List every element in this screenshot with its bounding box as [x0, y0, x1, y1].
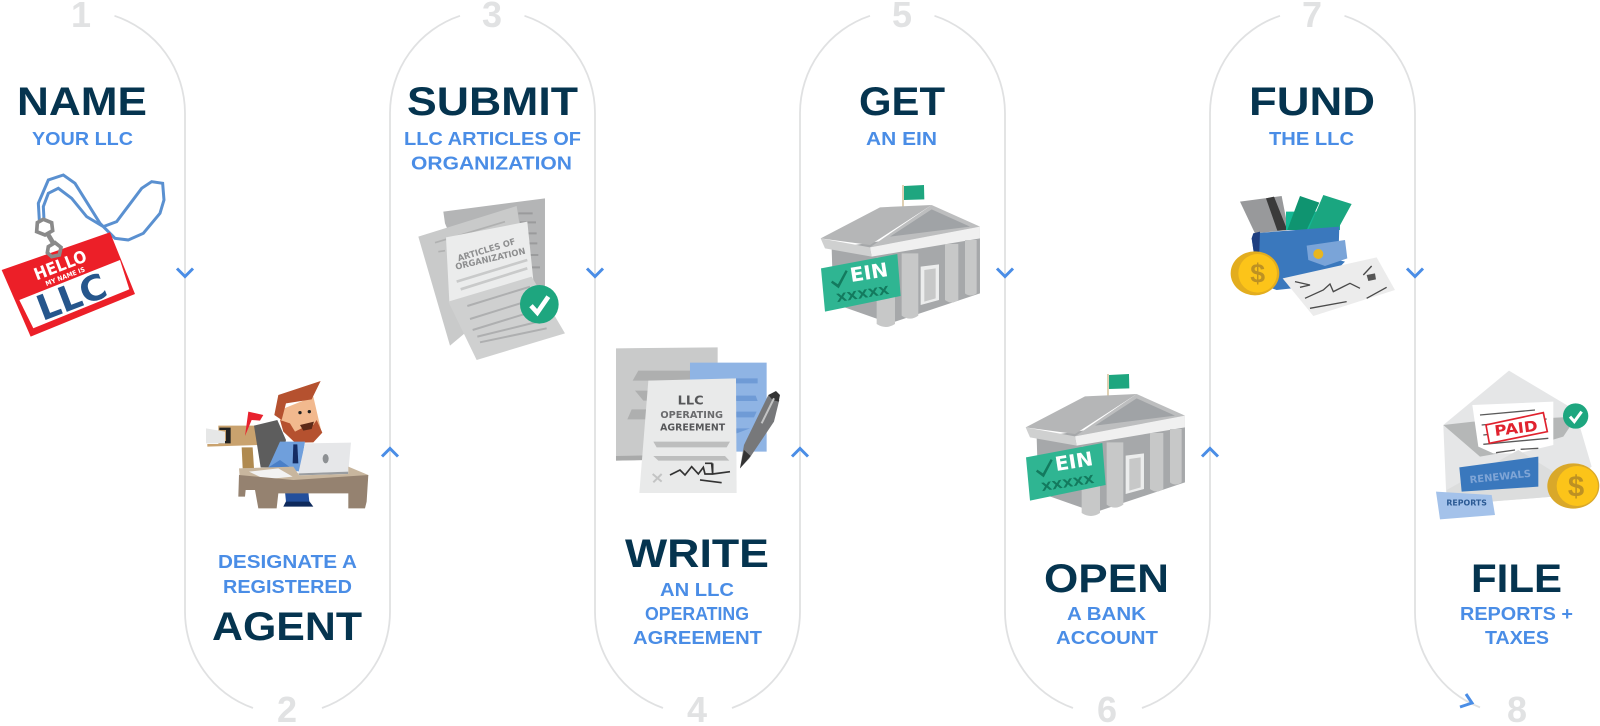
- subtitle: AN LLC: [660, 579, 734, 600]
- subtitle: [404, 128, 581, 174]
- subtitle: [1056, 603, 1159, 648]
- icon: wallet, coin and cheque: $: [1250, 259, 1265, 289]
- subtitle: AN EIN: [866, 128, 937, 149]
- heading FUND: FUND: [1249, 80, 1375, 124]
- icon: envelope with paid bill, reports and coin: RENEWALS: [1469, 469, 1532, 486]
- subtitle: ORGANIZATION: [411, 152, 572, 174]
- icon: envelope with paid bill, reports and coin: [1436, 371, 1599, 519]
- icon: envelope with paid bill, reports and coin: $: [1568, 471, 1584, 504]
- step 7: fund the LLC: [1231, 0, 1395, 316]
- step 6: open a bank account: [1026, 374, 1185, 726]
- icon: envelope with paid bill, reports and coin: PAID: [1494, 418, 1539, 440]
- subtitle: LLC ARTICLES OF: [404, 128, 581, 149]
- step 5: get an EIN: [821, 0, 980, 327]
- icon: operating agreement and pen: AGREEMENT: [660, 423, 725, 434]
- heading FILE: FILE: [1471, 557, 1562, 601]
- step 8: file reports and taxes: [1436, 371, 1599, 726]
- heading OPEN: OPEN: [1044, 557, 1169, 601]
- subtitle: YOUR LLC: [32, 128, 133, 149]
- icon: agent at desk with mailbox: [206, 381, 368, 508]
- subtitle: [1460, 603, 1573, 648]
- step 3: submit articles of organization: [404, 0, 581, 360]
- subtitle: TAXES: [1485, 627, 1549, 648]
- step 1: name your LLC: [2, 0, 164, 337]
- subtitle: [218, 551, 357, 597]
- arrows on connector: [177, 268, 1472, 707]
- icon: bank with EIN sign: EIN: [1053, 447, 1095, 476]
- icon: name badge on lanyard: MY NAME IS: [44, 266, 86, 288]
- heading GET: GET: [859, 80, 945, 124]
- icon: envelope with paid bill, reports and coin: REPORTS: [1446, 498, 1487, 507]
- subtitle: REPORTS +: [1460, 603, 1573, 624]
- icon: bank with EIN sign: XXXXX: [1040, 472, 1095, 494]
- heading WRITE: WRITE: [625, 532, 769, 576]
- icon: bank with EIN sign: [1026, 374, 1185, 516]
- icon: operating agreement and pen: [616, 347, 780, 493]
- step 2: designate a registered agent: [206, 381, 368, 726]
- icon: name badge on lanyard: [2, 175, 164, 337]
- icon: bank with EIN sign: EIN: [848, 258, 890, 287]
- icon: operating agreement and pen: OPERATING: [660, 410, 723, 421]
- icon: wallet, coin and cheque: [1231, 195, 1395, 316]
- subtitle: ACCOUNT: [1056, 627, 1159, 648]
- icon: bank with EIN sign: XXXXX: [835, 283, 890, 305]
- subtitle: [633, 579, 763, 648]
- heading NAME: NAME: [17, 80, 147, 124]
- subtitle: THE LLC: [1269, 128, 1354, 149]
- icon: articles document with check: ORGANIZATION: [455, 247, 527, 273]
- heading SUBMIT: SUBMIT: [407, 80, 578, 124]
- heading AGENT: AGENT: [212, 605, 362, 649]
- icon: operating agreement and pen: LLC: [678, 393, 704, 408]
- step 4: write operating agreement: [616, 347, 780, 726]
- subtitle: AGREEMENT: [633, 627, 763, 648]
- subtitle: REGISTERED: [223, 576, 352, 597]
- subtitle: DESIGNATE A: [218, 551, 357, 572]
- subtitle: OPERATING: [645, 603, 749, 624]
- icon: name badge on lanyard: LLC: [31, 267, 113, 330]
- icon: name badge on lanyard: HELLO: [31, 247, 89, 284]
- icon: articles document with check: [418, 198, 565, 360]
- icon: bank with EIN sign: [821, 185, 980, 327]
- subtitle: A BANK: [1067, 603, 1147, 624]
- icon: articles document with check: ARTICLES OF: [457, 237, 517, 264]
